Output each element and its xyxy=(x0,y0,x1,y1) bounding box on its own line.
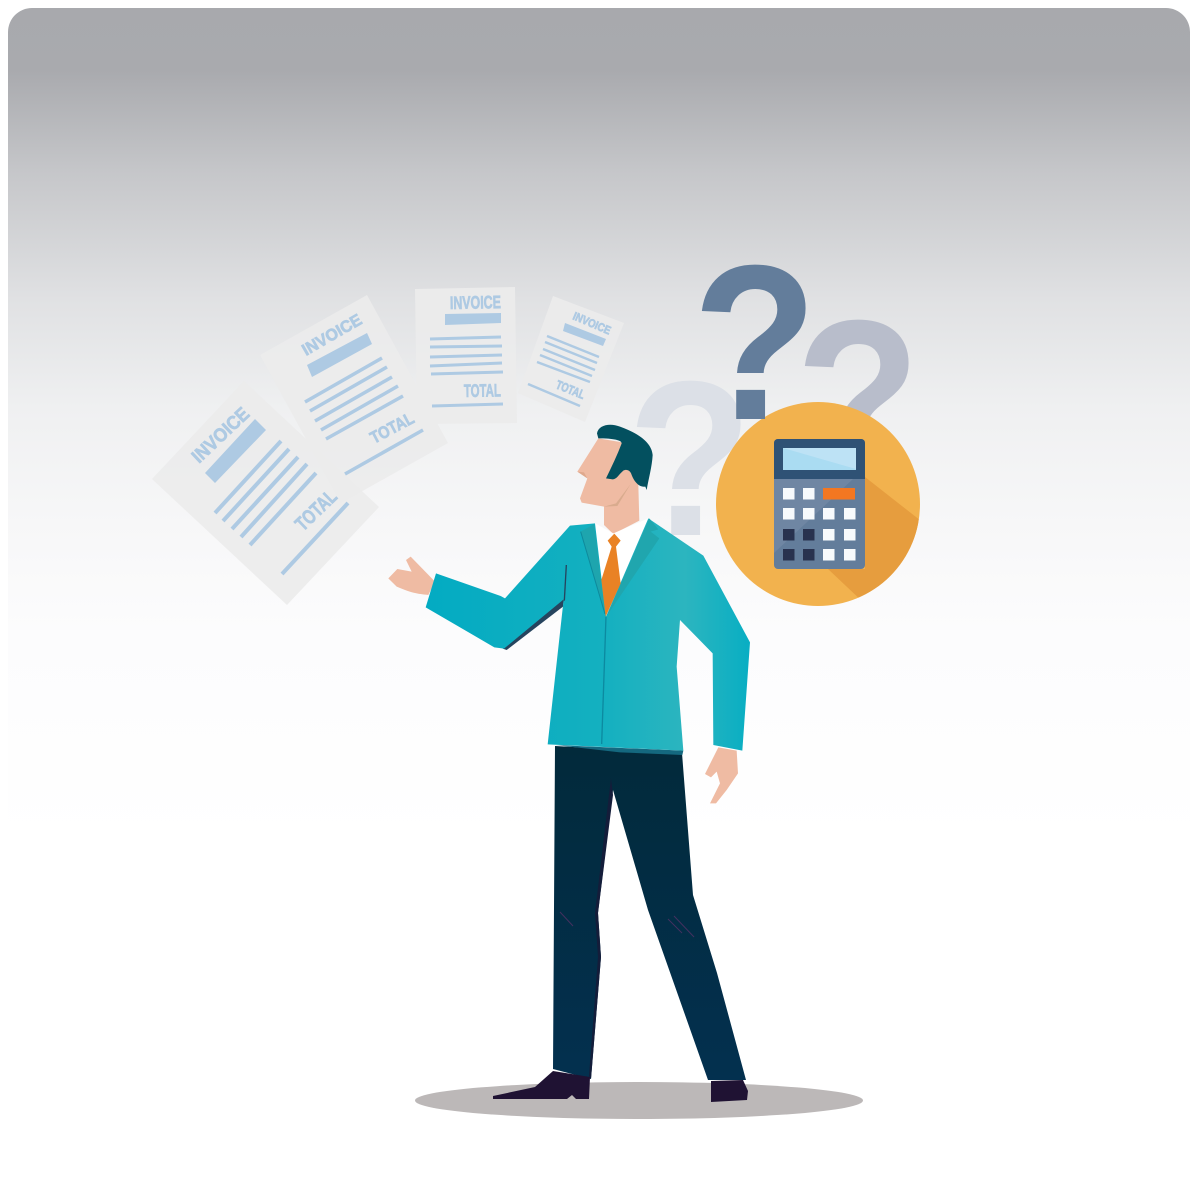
hair xyxy=(597,425,653,490)
sleeve fold line xyxy=(564,565,567,601)
invoice sheet 3: INVOICE xyxy=(450,292,501,313)
hand: left xyxy=(388,557,435,595)
shoes xyxy=(493,1071,748,1102)
invoice sheet 4: TOTAL xyxy=(554,378,587,402)
lapels xyxy=(581,524,605,613)
man figure xyxy=(388,425,750,1102)
shirt xyxy=(595,518,648,617)
invoice sheet 4: INVOICE xyxy=(571,311,613,337)
tie xyxy=(601,534,621,617)
question mark: dark centre: ? xyxy=(692,220,817,467)
jacket hem xyxy=(555,745,683,755)
ground shadow xyxy=(415,1082,863,1119)
invoice sheet 1: TOTAL xyxy=(291,486,342,536)
head and neck xyxy=(577,438,639,534)
invoice sheet 3: TOTAL xyxy=(464,380,501,401)
invoice sheet 1: INVOICE xyxy=(188,404,254,468)
jacket xyxy=(426,518,750,751)
upper body xyxy=(388,425,750,803)
icon: calculator badge xyxy=(716,402,920,606)
jacket seam xyxy=(602,617,606,744)
dark arm shade xyxy=(503,597,564,650)
question mark: light left: ? xyxy=(628,336,752,583)
hand: right xyxy=(705,747,738,803)
invoice sheet 2: INVOICE xyxy=(299,311,365,359)
invoice sheet 2 xyxy=(260,295,448,503)
invoice sheet 4 xyxy=(518,296,624,422)
question mark: grey right: ? xyxy=(796,275,920,522)
invoice sheet 1 xyxy=(152,381,379,605)
invoice sheet 3 xyxy=(415,287,517,424)
invoice sheet 2: TOTAL xyxy=(367,409,417,448)
trousers xyxy=(553,746,746,1080)
